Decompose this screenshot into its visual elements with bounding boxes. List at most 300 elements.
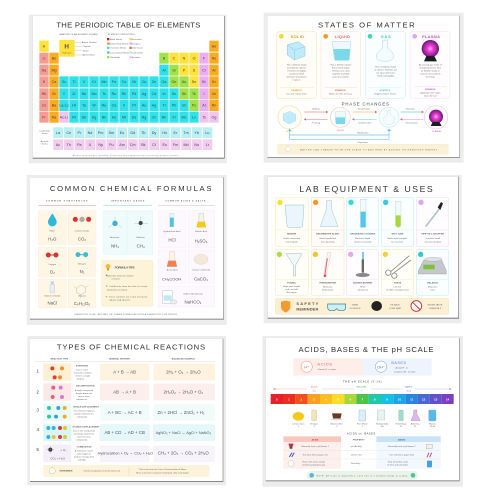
legend: element categories: Nonmetals <box>132 38 142 41</box>
lanthanide and actinide rows: U <box>89 143 92 147</box>
periodic grid: Ge <box>172 80 176 84</box>
card: thermometer: Measures <box>323 285 332 288</box>
card: funnel: FUNNEL <box>287 282 297 284</box>
group: acids and salts cards <box>158 211 215 307</box>
heading: phase changes: PHASE CHANGES <box>342 101 389 106</box>
bases definition box: produce OH⁻ in water <box>395 371 416 374</box>
panel: common chemical formulas <box>27 175 227 325</box>
bottom note: MATTER CAN CHANGE FROM ONE STATE TO ANOTHER BY ADDING OR REMOVING ENERGY. <box>300 148 439 151</box>
periodic grid: Re <box>102 104 106 108</box>
legend: element categories: Metalloids <box>110 56 120 59</box>
pH colour bar: 7 <box>361 397 363 401</box>
card: beaker: heats liquids <box>286 240 298 243</box>
periodic grid: In <box>162 92 166 96</box>
callout: formula tips: State symbols (s) solid, (l) liquid, <box>109 295 148 298</box>
card: bunsen burner: Heats <box>360 285 365 288</box>
title: COMMON CHEMICAL FORMULAS <box>50 184 211 193</box>
periodic grid: Ga <box>162 80 167 84</box>
periodic grid: Si <box>172 68 176 72</box>
periodic grid: Mg <box>51 68 57 72</box>
acids definition box <box>293 358 363 376</box>
panel: states of matter <box>264 13 464 163</box>
row 3: single displacement: Zn + 2HCl → ZnCl₂ + H₂ <box>158 410 205 415</box>
group: acids and salts cards: NaHCO₃ <box>185 299 202 304</box>
periodic grid: Po <box>192 104 196 108</box>
column heading: acids and salts: COMMON ACIDS & SALTS <box>165 200 206 203</box>
row 2: decomposition: substances. <box>76 398 88 401</box>
card: solid: and definite volume. <box>287 67 307 70</box>
panel: types of chemical reactions <box>27 336 226 485</box>
periodic grid: Ru <box>112 92 116 96</box>
periodic grid: Og <box>212 115 216 119</box>
lanthanide and actinide rows: Pu <box>109 143 114 147</box>
row 1: synthesis: to form a single <box>75 375 91 378</box>
card: balance: BALANCE <box>427 281 438 284</box>
periodic grid: Ds <box>132 115 136 119</box>
card: funnel: and can hold <box>285 289 299 291</box>
group: common substances cards: Sodium Chloride <box>44 295 61 298</box>
periodic grid: Ba <box>52 104 57 108</box>
periodic grid: Ar <box>212 68 217 72</box>
callout: formula tips: Subscripts show the number <box>106 274 134 277</box>
phase change arrows <box>288 108 424 144</box>
periodic grid: Cs <box>42 104 46 108</box>
lanthanide and actinide rows: Lu <box>205 131 209 135</box>
pH colour bar: 5 <box>337 397 339 401</box>
periodic grid: O <box>193 56 196 60</box>
row 4: double displacement: AB + CD → AD + CB <box>104 430 145 435</box>
phase diagram nodes: SOLID <box>286 131 293 133</box>
lanthanide and actinide rows: Es <box>163 143 167 147</box>
card: pipette and dropper <box>416 197 449 247</box>
periodic grid: W <box>92 104 96 108</box>
phase change arrows: Melting <box>313 108 320 111</box>
column heading: important gases <box>103 200 152 205</box>
comparison table: ACIDS <box>312 438 319 441</box>
phase change arrows: Evaporation <box>358 108 371 111</box>
periodic grid: Ra <box>52 115 57 119</box>
comparison table: to form salt and water <box>387 464 408 467</box>
row 5: combustion: produce energy, heat <box>74 456 95 459</box>
comparison table: React with some metals <box>302 461 325 464</box>
title: ACIDS, BASES & THE pH SCALE <box>298 345 433 354</box>
lanthanide and actinide rows: Ac <box>56 143 60 147</box>
callout: formula tips: of atoms. <box>112 278 121 281</box>
column heading: acids and salts <box>158 200 215 205</box>
lanthanide and actinide rows: Ce <box>66 131 71 135</box>
panel: periodic table <box>29 15 227 163</box>
comparison table: Generally have a pH below 7 <box>301 445 330 448</box>
card: liquid <box>321 32 361 98</box>
phase diagram nodes: GAS <box>387 129 392 132</box>
safety reminder bar: WEAR <box>352 303 359 306</box>
card: test tube: for reactions <box>391 240 403 243</box>
table headers: BALANCED EXAMPLE <box>172 358 195 361</box>
card: liquid: together and slide <box>332 73 350 76</box>
card: gas <box>366 32 405 98</box>
table headers <box>35 358 215 362</box>
callout: formula tips <box>102 260 153 306</box>
bottom note <box>278 144 448 154</box>
periodic grid: Fl <box>172 115 176 119</box>
icon: shield <box>281 301 290 313</box>
card: test tube: Holds small samples <box>387 238 407 240</box>
card: thermometer: temperature <box>322 289 334 292</box>
safety reminder bar: LONG HAIR <box>389 307 401 310</box>
lanthanide and actinide rows: Lr <box>206 143 210 147</box>
periodic grid: Na <box>42 68 47 72</box>
footnote: Atomic masses are rounded. Elements are organized by increasing atomic number. <box>73 154 180 157</box>
group: important gases cards <box>103 211 153 254</box>
summary bar: This is because the Law of Conservation of Mass: <box>139 468 187 471</box>
periodic grid: Al <box>162 68 166 72</box>
card: plasma: An ionized gas made of <box>419 63 442 66</box>
lanthanide and actinide rows <box>53 127 212 150</box>
row 3: single displacement: A + BC → AC + B <box>108 410 142 415</box>
card: plasma: PLASMA <box>422 34 440 39</box>
group: acids and salts cards: Sodium Bicarbonate <box>183 292 204 295</box>
card: liquid: Has a definite volume <box>331 64 352 67</box>
safety reminder bar: CHEMICALS <box>429 307 442 310</box>
callout: formula tips: (g) gas, (aq) aqueous. <box>109 299 131 301</box>
group: acids and salts cards: Hydrochloric Acid <box>164 230 181 233</box>
card: pipette and dropper: PIPETTE & DROPPER <box>421 234 444 236</box>
periodic grid: Rf <box>72 115 77 119</box>
periodic grid: S <box>193 68 196 72</box>
card: bunsen burner: BUNSEN BURNER <box>353 282 373 284</box>
bottom note <box>307 471 417 479</box>
bases definition box <box>363 358 432 376</box>
pH examples: Baking Soda <box>376 423 389 425</box>
legend: element categories: Lanthanides <box>131 51 143 54</box>
periodic grid: Db <box>82 115 86 119</box>
periodic grid: P <box>183 68 186 72</box>
row 4: double displacement: exchange partners to <box>74 432 95 435</box>
lanthanide and actinide rows: Gd <box>130 131 135 135</box>
pH colour bar: 1 <box>288 397 290 401</box>
lanthanide and actinide rows: Tm <box>183 131 189 135</box>
card: graduated cylinder: Measures liquid <box>355 237 371 240</box>
row 1: synthesis: product. <box>77 378 85 381</box>
group: common substances cards: Nitrogen <box>78 262 87 265</box>
pH colour bar: 2 <box>300 397 302 401</box>
element key: Hydrogen <box>62 51 72 54</box>
pH examples: 2 <box>298 426 300 428</box>
lanthanide and actinide rows: Sm <box>109 131 114 135</box>
row 2: decomposition <box>36 383 215 401</box>
lanthanide and actinide rows: Pr <box>78 131 82 135</box>
lanthanide and actinide rows: Cm <box>130 143 136 147</box>
pH colour bar: 9 <box>386 397 388 401</box>
pH range labels: 0-6 <box>313 391 317 393</box>
card: beaker: BEAKER <box>287 233 297 236</box>
row 2: decomposition: two or more <box>78 395 90 398</box>
periodic grid: H <box>43 44 46 48</box>
legend: element categories: Actinides <box>132 56 140 59</box>
periodic grid: Rh <box>122 92 126 96</box>
card: bunsen burner <box>347 249 379 295</box>
card: graduated cylinder: GRADUATED CYLINDER <box>350 233 376 236</box>
lanthanide and actinide rows: La <box>56 131 61 135</box>
periodic grid: V <box>83 80 86 84</box>
periodic grid: Ta <box>82 104 87 108</box>
comparison table: Reactivity <box>351 462 361 465</box>
pH range labels: 7 <box>361 391 363 393</box>
acids definition box: ACIDS <box>317 361 332 366</box>
bases definition box: BASES <box>391 360 406 365</box>
lanthanide and actinide rows: Cf <box>152 143 157 147</box>
element key: Symbol <box>83 46 91 48</box>
column heading: common substances <box>38 200 96 205</box>
row 1: synthesis: 2H₂ + O₂ → 2H₂O <box>166 369 201 374</box>
card: solid <box>277 32 317 98</box>
periodic grid: Pb <box>172 104 176 108</box>
periodic grid: Lv <box>192 115 196 119</box>
pH examples: Black Coffee <box>331 423 344 425</box>
pH colour bar: 10 <box>398 397 401 401</box>
pH range labels: 8-14 <box>407 391 412 393</box>
row 2: decomposition: 2 <box>36 389 39 394</box>
title: TYPES OF CHEMICAL REACTIONS <box>57 343 205 352</box>
legend: element categories: Alkali Metals <box>110 38 122 41</box>
safety reminder bar: NEVER TASTE <box>428 303 443 306</box>
pH examples: 13-14 <box>430 426 436 428</box>
periodic grid: Be <box>52 56 56 60</box>
periodic grid: Ca <box>52 80 57 84</box>
periodic grid: Kr <box>212 80 217 84</box>
pH colour bar: 12 <box>422 397 426 401</box>
pH range labels: ACIDS <box>311 385 318 388</box>
periodic grid: Pt <box>132 104 136 108</box>
lanthanide and actinide rows: Th <box>67 143 71 147</box>
pH examples: 10 <box>400 426 403 428</box>
row 2: decomposition: DECOMPOSITION <box>76 386 95 388</box>
periodic grid: B <box>163 56 166 60</box>
group: acids and salts cards: Acetic Acid <box>167 269 178 272</box>
card: liquid: Water, oil, milk, mercury <box>329 93 353 96</box>
group: acids and salts cards: CaCO₃ <box>194 277 208 282</box>
lanthanide and actinide rows: Tb <box>141 131 145 135</box>
row 2: decomposition: A single compound <box>75 389 94 392</box>
legend: element categories: Halogens <box>131 43 141 45</box>
row 5: combustion: and light. <box>78 459 87 462</box>
card: funnel <box>275 249 309 295</box>
pH examples: 5 <box>336 426 338 428</box>
card: thermometer: THERMOMETER <box>319 282 337 284</box>
lanthanide and actinide rows: Yb <box>194 131 199 135</box>
periodic grid: Fr <box>42 115 47 119</box>
periodic grid: Li <box>43 56 46 60</box>
lanthanide and actinide rows: Pm <box>98 131 103 135</box>
card: beaker: Holds, mixes and <box>283 238 301 240</box>
card: balance <box>416 249 449 295</box>
card: plasma <box>410 32 450 98</box>
card: solid: Ice, salt, metal, stone <box>286 93 308 96</box>
row 5: combustion: CO₂ + H₂O <box>50 457 66 461</box>
legend: element categories: Noble Gases <box>130 48 143 50</box>
card: liquid: past one another. <box>333 76 350 79</box>
card: pipette and dropper: Transfers small <box>425 237 441 240</box>
row 2: decomposition: AB → A + B <box>113 390 136 395</box>
pH examples: Ammonia <box>411 422 421 425</box>
card: erlenmeyer flask: Swirls liquids and <box>319 237 337 240</box>
pH colour bar: 0 <box>276 397 278 401</box>
lanthanide and actinide rows: Er <box>174 131 178 135</box>
row 1: synthesis: Two or more <box>76 369 89 372</box>
card: liquid: EXAMPLE <box>335 89 346 92</box>
safety reminder bar: TIE BACK <box>390 303 400 306</box>
periodic grid: Nb <box>82 92 86 96</box>
periodic grid: Rn <box>212 104 216 108</box>
series labels: Lanthanide <box>39 129 51 132</box>
periodic grid: Mn <box>101 80 107 84</box>
periodic grid: As <box>182 80 186 84</box>
periodic grid: Hf <box>72 104 77 108</box>
card: solid: Has a definite shape <box>287 64 307 67</box>
comparison table: PROPERTY <box>353 439 365 441</box>
row 3: single displacement: another element in a <box>74 412 95 415</box>
safety reminder bar: REMINDER <box>296 306 318 311</box>
pH range labels <box>273 385 452 393</box>
periodic grid: Ni <box>132 80 136 84</box>
bases definition box: Accept H⁺ or <box>395 366 408 369</box>
pH examples: 8-9 <box>381 426 385 428</box>
periodic grid: Tc <box>102 92 106 96</box>
card: gas: or volume. Particles are <box>374 68 398 71</box>
pH colour bar <box>271 394 454 404</box>
summary bar: Mass cannot be created or destroyed, only rearranged. <box>136 472 189 475</box>
row 3: single displacement <box>36 404 215 421</box>
row 1: synthesis: 1 <box>36 369 39 374</box>
acids definition box: H⁺ <box>304 364 309 369</box>
row 5: combustion: CH₄ + 2O₂ → CO₂ + 2H₂O <box>158 450 209 455</box>
panel: lab equipment and uses <box>264 175 462 323</box>
row 4: double displacement: DOUBLE DISPLACEMENT <box>73 425 100 428</box>
icon: tie back hair <box>371 301 382 311</box>
periodic grid: K <box>43 80 46 84</box>
card: gas: freely and rapidly. <box>377 74 395 77</box>
group: common substances cards: Glucose <box>78 296 87 298</box>
comparison table <box>283 436 441 469</box>
lanthanide and actinide rows: Md <box>183 143 189 147</box>
group: acids and salts cards: HCl <box>168 238 176 243</box>
safety reminder bar: GOGGLES <box>350 308 361 310</box>
pH scale heading: THE pH SCALE (0-14) <box>343 380 382 383</box>
element key <box>59 33 98 57</box>
card: beaker <box>275 197 309 247</box>
row 1: synthesis: A + B → AB <box>113 369 136 374</box>
card: tongs: TONGS <box>394 282 402 284</box>
card: plasma: volume and conducts <box>420 72 441 75</box>
group: common substances cards: N₂ <box>80 269 85 274</box>
title: LAB EQUIPMENT & USES <box>299 184 433 194</box>
periodic grid: Hg <box>152 104 156 108</box>
comparison heading: ACIDS vs. BASES <box>347 432 375 435</box>
row 5: combustion: Hydrocarbon + O₂ → CO₂ + H₂O <box>98 451 153 455</box>
periodic grid: C <box>173 56 176 60</box>
group: acids and salts cards: Sulfuric Acid <box>195 230 208 233</box>
card: plasma: stars, the sun <box>424 94 438 97</box>
periodic grid: Os <box>112 104 116 108</box>
legend: element categories: Transition Metals <box>110 47 126 50</box>
periodic grid: F <box>203 56 206 60</box>
card: gas: Has no definite shape <box>375 65 397 68</box>
periodic grid: Rg <box>142 115 146 119</box>
periodic grid: Y <box>63 92 66 96</box>
element key: Name <box>83 50 90 52</box>
card: funnel: filter paper <box>287 291 297 294</box>
pH examples: 11 <box>414 426 417 428</box>
series labels: Actinide <box>41 140 49 143</box>
card: gas: Oxygen, helium, steam <box>374 93 396 96</box>
row 4: double displacement: Ions in two compounds <box>73 429 95 432</box>
pH examples: Pure Water <box>357 422 368 425</box>
card: graduated cylinder: volume accurately <box>354 240 372 243</box>
lanthanide and actinide rows: Fm <box>173 143 178 147</box>
periodic grid: Ts <box>202 115 206 119</box>
periodic grid: Sn <box>172 92 176 96</box>
periodic grid: Mt <box>122 115 126 119</box>
table headers: GENERAL PATTERN <box>109 358 130 361</box>
periodic grid: I <box>203 92 205 96</box>
group: important gases cards: Ammonia <box>110 236 120 239</box>
periodic grid: Ac-Lr <box>60 115 69 119</box>
card: solid: SOLID <box>291 34 304 39</box>
group: important gases cards: Methane <box>136 236 146 239</box>
comparison table: They neutralize acids <box>387 461 408 464</box>
row 2: decomposition: 2H₂O₂ → 2H₂O + O₂ <box>164 390 203 395</box>
legend: element categories: Post-transition Metals <box>108 51 129 54</box>
card: erlenmeyer flask: ERLENMEYER FLASK <box>316 233 339 236</box>
periodic grid: Cd <box>152 92 156 96</box>
periodic grid: Zr <box>72 92 77 96</box>
lanthanide and actinide rows: Am <box>119 143 125 147</box>
lanthanide and actinide rows: Nd <box>88 131 92 135</box>
pH colour bar: 6 <box>349 397 351 401</box>
phase diagram nodes <box>278 106 448 133</box>
card: gas: GAS <box>381 34 391 39</box>
row 3: single displacement: One element replaces <box>73 409 95 412</box>
card: plasma: EXAMPLE <box>425 88 436 91</box>
row 4: double displacement: compounds. <box>76 439 88 441</box>
card: tongs <box>381 249 414 295</box>
card: tongs: crucibles and glassware <box>386 289 410 292</box>
pH examples: Hand Soap <box>396 423 407 425</box>
safety reminder bar <box>275 298 449 314</box>
card: test tube: TEST TUBE <box>391 234 404 236</box>
comparison table: Generally have a pH above 7 <box>388 445 416 448</box>
row 4: double displacement: form two new <box>78 435 91 438</box>
card: gas: EXAMPLE <box>380 89 391 92</box>
group: common substances cards: CO₂ <box>78 237 86 242</box>
periodic grid: Cr <box>92 80 97 84</box>
pH examples: Vinegar <box>310 422 318 425</box>
periodic grid: Mc <box>182 115 187 119</box>
acids definition box: Donate H⁺ in water <box>318 368 336 371</box>
card: graduated cylinder <box>347 197 379 247</box>
row 2: decomposition: breaks down into <box>76 392 93 395</box>
card: bunsen burner: substances <box>357 289 368 292</box>
row 5: combustion: A substance reacts <box>75 450 93 453</box>
card: pipette and dropper: amounts of liquid <box>425 240 442 243</box>
group: acids and salts cards: CH₃COOH <box>162 276 181 281</box>
periodic grid: Zn <box>152 80 156 84</box>
card: thermometer <box>311 249 344 295</box>
pH range labels: NEUTRAL <box>357 385 367 388</box>
periodic grid: Cl <box>202 68 206 72</box>
pH range labels: BASES <box>405 385 413 388</box>
periodic grid: Te <box>192 92 196 96</box>
